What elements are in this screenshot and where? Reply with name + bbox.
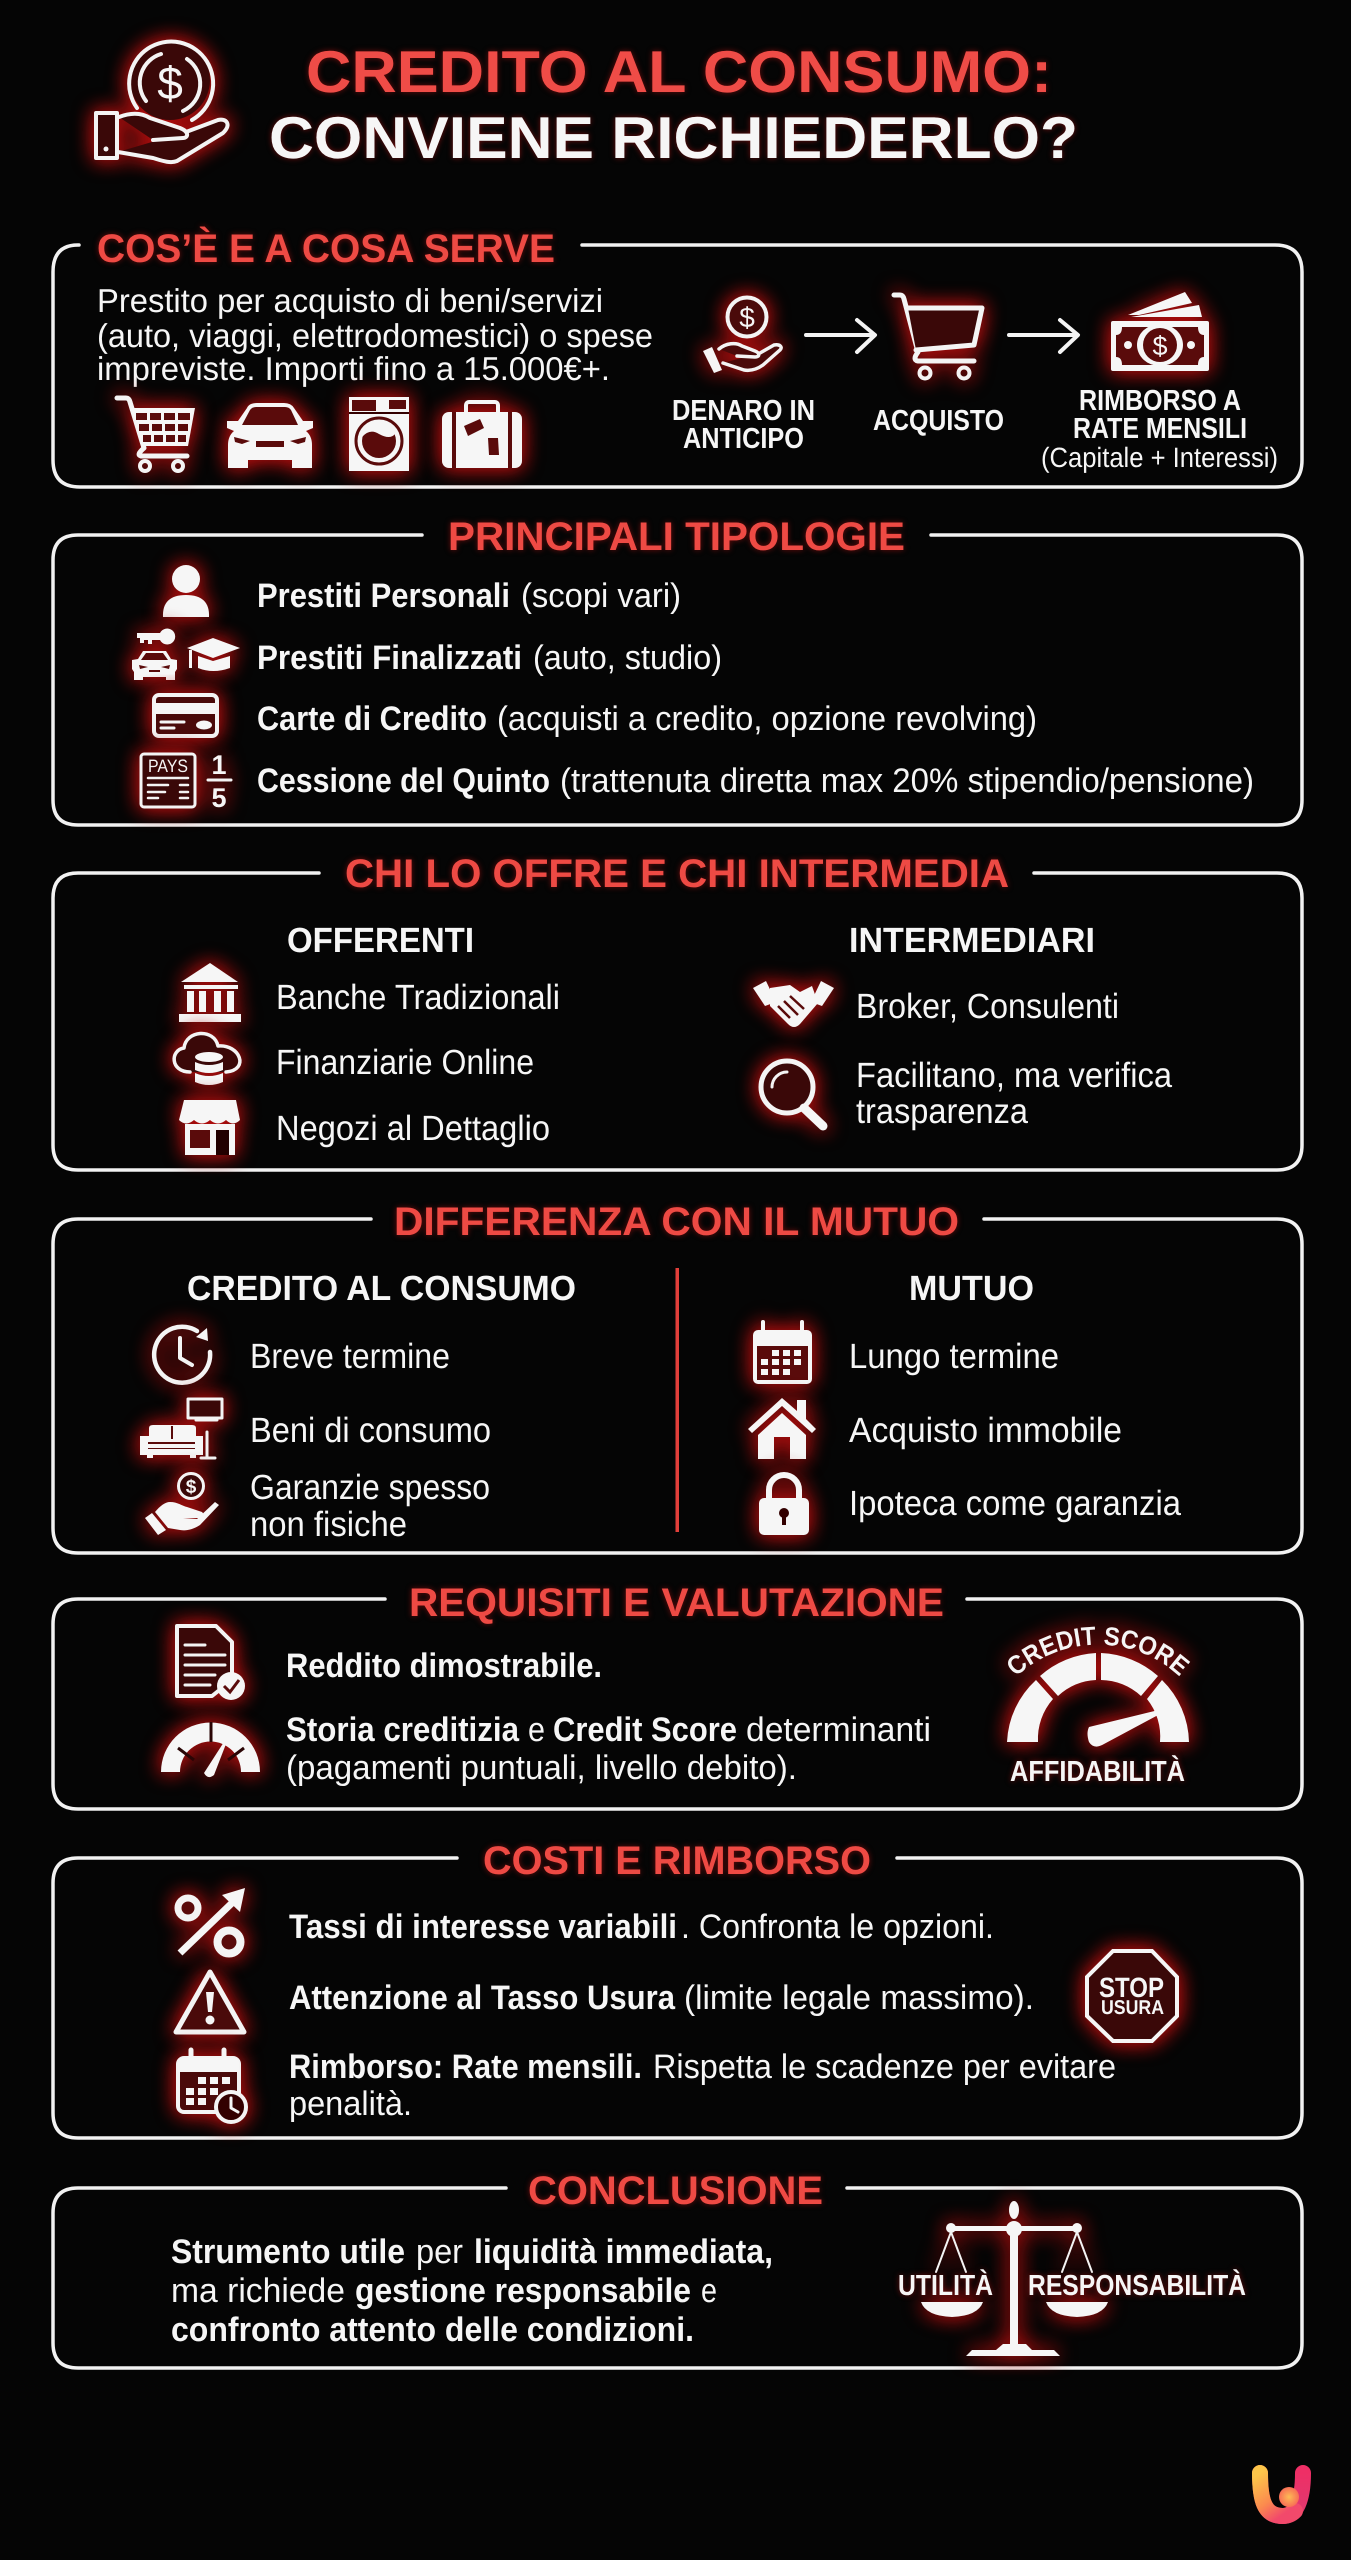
icon: payslip with one fifth: PAYS [148,756,188,776]
icon: clock [154,1327,210,1383]
icon: payslip with one fifth: 1 [211,750,227,780]
label: rimborso a rate mensili [1041,385,1278,473]
row: rimborso [289,2048,1116,2123]
label: denaro in anticipo: ANTICIPO [683,423,804,455]
conclusion text: gestione responsabile [355,2272,691,2310]
heading: COSTI E RIMBORSO [483,1839,871,1883]
icon: money in hand [703,298,781,373]
text: ipoteca come garanzia: Ipoteca come garanzia [849,1484,1181,1523]
icon: stop usura sign [1087,1951,1177,2041]
description text [97,282,653,387]
icon: shopping cart [117,398,195,471]
label: responsabilità: RESPONSABILITÀ [1028,2269,1246,2302]
divider [676,1268,679,1532]
title line 2: CONVIENE RICHIEDERLO? [269,105,1078,171]
icon: balance scale [921,2201,1108,2356]
text: storia creditizia e credit score: Storia creditizia [286,1711,520,1749]
icon: magnifier [761,1061,823,1126]
row: cessione del quinto [257,762,1254,800]
panel: cos'è e a cosa serve [53,226,1302,487]
icon: car [227,403,313,468]
row: rimborso: Rimborso: Rate mensili. [289,2048,642,2086]
text: banche tradizionali: Banche Tradizionali [276,978,560,1017]
panel: conclusione [53,2169,1302,2368]
panel: principali tipologie [53,515,1302,825]
icon: banknotes: $ [1152,331,1168,361]
icon: payslip with one fifth [141,750,231,813]
icon: warning triangle [176,1972,244,2032]
row: cessione del quinto: Cessione del Quinto [257,762,550,800]
conclusion text: Strumento utile [171,2233,405,2271]
description text: impreviste. Importi fino a 15.000€+. [97,350,610,387]
icon: bank [179,963,241,1022]
icon: washing machine [349,397,409,471]
heading: CONCLUSIONE [528,2169,823,2213]
conclusion text: per [416,2233,463,2271]
row: prestiti personali: Prestiti Personali [257,577,510,615]
text: storia creditizia e credit score: determinanti [746,1711,931,1749]
row: rimborso: penalità. [289,2085,412,2123]
icon: money in hand: $ [739,302,755,333]
row: prestiti personali [257,577,681,615]
row: prestiti finalizzati: (auto, studio) [533,639,722,677]
heading: COS’È E A COSA SERVE [97,226,555,271]
panel: chi lo offre e chi intermedia [53,852,1302,1170]
row: tassi di interesse: . Confronta le opzioni. [681,1908,994,1946]
text: acquisto immobile: Acquisto immobile [849,1411,1122,1450]
icon: hand holding coin [96,40,227,162]
text: breve termine: Breve termine [250,1337,450,1376]
row: cessione del quinto: (trattenuta diretta max 20% stipendio/pensione) [560,762,1254,800]
text: garanzie spesso non fisiche: Garanzie spesso [250,1468,490,1507]
row: tassi di interesse [289,1908,994,1946]
panel: costi e rimborso [53,1839,1302,2138]
icon: stop usura sign: STOP [1099,1972,1164,2003]
column heading: intermediari: INTERMEDIARI [849,921,1095,960]
text: reddito dimostrabile: Reddito dimostrabile. [286,1647,602,1685]
panel: differenza con il mutuo [53,1200,1302,1553]
icon: person [163,565,209,617]
arrow: money to purchase [806,320,875,352]
text: storia creditizia e credit score: e [528,1711,545,1749]
row: tasso usura: (limite legale massimo). [684,1979,1034,2017]
row: carte di credito [257,700,1037,738]
label: rimborso a rate mensili: (Capitale + Interessi) [1041,442,1278,473]
icon: suitcase [442,402,522,468]
text: beni di consumo: Beni di consumo [250,1411,491,1450]
conclusion text: liquidità immediata, [474,2233,773,2271]
icon: hand holding coin: $ [157,57,183,109]
text: storia creditizia e credit score [286,1711,931,1787]
text: garanzie spesso non fisiche [250,1468,490,1544]
label: acquisto: ACQUISTO [873,405,1004,437]
text: garanzie spesso non fisiche: non fisiche [250,1505,407,1544]
label: rimborso a rate mensili: RIMBORSO A [1079,385,1241,417]
description text: Prestito per acquisto di beni/servizi [97,282,603,319]
icon: cart [894,295,982,378]
arrow: purchase to repayment [1009,320,1078,352]
label: rimborso a rate mensili: RATE MENSILI [1073,413,1247,445]
icon: calendar [753,1322,812,1384]
row: rimborso: Rispetta le scadenze per evitare [653,2048,1116,2086]
text: facilitano, ma verifica trasparenza [856,1056,1172,1131]
label: denaro in anticipo: DENARO IN [672,395,815,427]
icon: calendar with clock [178,2050,246,2122]
heading: PRINCIPALI TIPOLOGIE [448,515,905,559]
icon: handshake [753,981,834,1027]
icon: house [748,1398,816,1459]
icon: hand with coin: $ [186,1477,197,1498]
text: broker, consulenti: Broker, Consulenti [856,987,1119,1026]
title line 1: CREDITO AL CONSUMO: [306,39,1052,105]
text: facilitano, ma verifica trasparenza: Facilitano, ma verifica [856,1056,1172,1095]
column heading: credito al consumo: CREDITO AL CONSUMO [187,1269,576,1308]
label: affidabilità: AFFIDABILITÀ [1010,1755,1185,1788]
icon: hand with coin [145,1474,219,1535]
row: carte di credito: Carte di Credito [257,700,487,738]
row: tasso usura [289,1979,1034,2017]
column heading: mutuo: MUTUO [909,1269,1034,1308]
icon: cloud database [174,1033,240,1085]
text: storia creditizia e credit score: Credit Score [553,1711,737,1749]
conclusion text: e [701,2272,717,2310]
description text: (auto, viaggi, elettrodomestici) o spese [97,317,653,354]
conclusion text: confronto attento delle condizioni. [171,2311,694,2349]
icon: banknotes [1111,292,1209,371]
icon: padlock [759,1475,809,1535]
icon: shop [179,1100,240,1155]
icon: credit score gauge [992,1614,1204,1762]
text: storia creditizia e credit score: (pagamenti puntuali, livello debito). [286,1749,797,1787]
icon: credit card [154,695,217,736]
title block [96,39,1078,171]
row: tasso usura: Attenzione al Tasso Usura [289,1979,676,2017]
icon: tv and sofa [140,1399,222,1458]
icon: key, car and graduation cap [132,628,240,680]
icon: payslip with one fifth: 5 [211,783,227,813]
heading: DIFFERENZA CON IL MUTUO [394,1200,959,1244]
text: negozi al dettaglio: Negozi al Dettaglio [276,1109,550,1148]
conclusion text: ma richiede [171,2272,345,2310]
panel: requisiti e valutazione [51,1581,1304,1811]
label: denaro in anticipo [672,395,815,455]
row: prestiti personali: (scopi vari) [521,577,681,615]
conclusion text [171,2233,773,2349]
row: prestiti finalizzati: Prestiti Finalizzati [257,639,522,677]
icon: stop usura sign: USURA [1101,1997,1164,2019]
row: prestiti finalizzati [257,639,722,677]
label: utilità: UTILITÀ [898,2269,993,2302]
column heading: offerenti: OFFERENTI [287,921,474,960]
heading: REQUISITI E VALUTAZIONE [409,1581,944,1625]
row: carte di credito: (acquisti a credito, opzione revolving) [497,700,1037,738]
curved label: credit score: CREDIT SCORE [996,1614,1199,1686]
text: facilitano, ma verifica trasparenza: trasparenza [856,1092,1028,1131]
text: finanziarie online: Finanziarie Online [276,1043,534,1082]
heading: CHI LO OFFRE E CHI INTERMEDIA [345,852,1009,896]
icon: income document [177,1626,245,1700]
text: lungo termine: Lungo termine [849,1337,1059,1376]
icon: percent with arrow [178,1888,245,1954]
row: tassi di interesse: Tassi di interesse variabili [289,1908,677,1946]
icon: small gauge [161,1722,260,1777]
logo [1260,2473,1303,2516]
